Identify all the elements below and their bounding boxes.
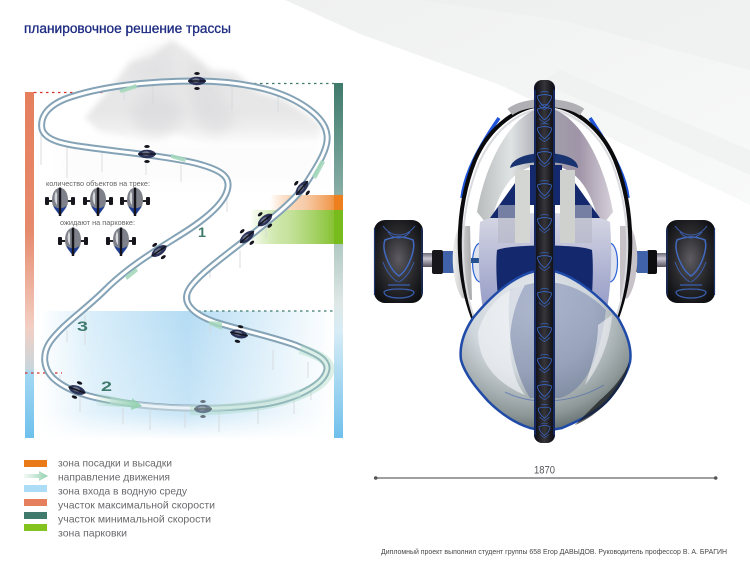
- speed boundary dotted lines: [25, 84, 334, 373]
- cockpit floor: [479, 213, 611, 318]
- dimension line: [374, 464, 718, 480]
- water entry zone: [40, 311, 334, 438]
- vehicles waiting in parking: ожидают на парковке:: [60, 218, 135, 227]
- outer shell ring: [460, 103, 630, 318]
- direction arrow 2: [96, 393, 142, 410]
- direction highlights: [119, 84, 325, 330]
- right wheel: [666, 220, 715, 303]
- track number 3: 3: [77, 318, 88, 334]
- upper cowl: [477, 107, 613, 228]
- left wheel axle: [422, 250, 459, 274]
- left wheel: [374, 220, 423, 303]
- background streaks: [285, 0, 750, 205]
- return curve highlight: [190, 349, 329, 410]
- vehicle top view: [374, 80, 715, 443]
- track number 1: 1: [198, 224, 206, 240]
- outer blue accents: [462, 118, 628, 198]
- maximum speed bar: [25, 92, 34, 438]
- panel: track plan: [25, 40, 343, 438]
- right wheel axle: [632, 250, 667, 274]
- vehicles on track count: [45, 179, 150, 216]
- side pods: [453, 226, 637, 300]
- legend: parking: [24, 524, 127, 540]
- legend: water entry: зона входа в водную среду: [58, 486, 188, 498]
- legend: parking: зона парковки: [58, 528, 127, 540]
- seat: [490, 153, 600, 315]
- overlay of zone colours on right bar: [334, 195, 343, 244]
- track: [42, 81, 327, 408]
- minimum speed bar: [334, 83, 343, 438]
- parking zone: [250, 210, 343, 244]
- front glass bubble: [461, 270, 630, 431]
- central mast: [534, 80, 555, 443]
- credit line: Дипломный проект выполнил студент группы 658 Егор ДАВЫДОВ. Руководитель профессор В. А. БРАГИН: [381, 547, 727, 556]
- water fade over track: [110, 393, 300, 408]
- vehicles on track count: количество объектов на треке:: [46, 179, 150, 188]
- track number 2: 2: [101, 378, 112, 394]
- boarding zone: [270, 195, 343, 210]
- dimension line: 1870: [534, 464, 555, 476]
- vehicles on track: [65, 72, 315, 418]
- mountain background: [60, 40, 325, 185]
- title: планировочное решение трассы: [24, 21, 231, 36]
- legend: min speed: участок минимальной скорости: [58, 514, 211, 526]
- pylons: [41, 84, 311, 432]
- legend: [24, 458, 215, 540]
- legend: max speed: участок максимальной скорости: [58, 500, 215, 512]
- vehicles waiting in parking: [58, 218, 136, 256]
- legend: boarding zone: зона посадки и высадки: [58, 458, 172, 470]
- legend: direction: направление движения: [58, 472, 170, 484]
